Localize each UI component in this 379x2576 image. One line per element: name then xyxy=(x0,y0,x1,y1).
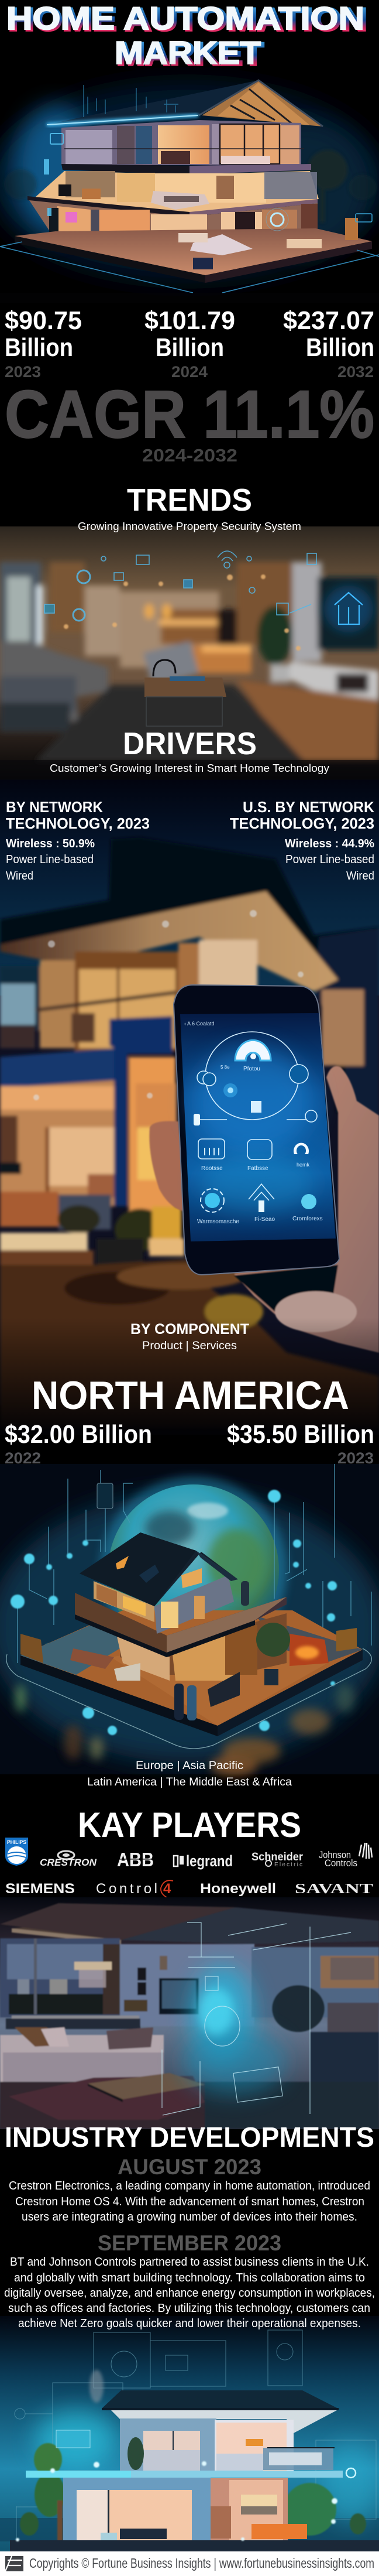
sofa xyxy=(0,2035,164,2082)
floor reflections xyxy=(16,1684,354,1776)
neon ground lines xyxy=(0,242,379,293)
middle floor xyxy=(35,171,319,213)
regional labels: Latin America | The Middle East & Africa xyxy=(87,1776,292,1788)
logo: Crestron xyxy=(40,1851,97,1868)
stat: 2024 value: $101.79 xyxy=(144,306,235,335)
footer bar xyxy=(0,2551,379,2576)
image: modern house with smart overlays xyxy=(0,2316,379,2551)
globe xyxy=(100,1476,287,1664)
palm trees xyxy=(4,150,377,223)
by component: Product | Services xyxy=(142,1340,237,1352)
bottom fade of house image xyxy=(0,1318,379,1435)
network technology share, U.S.: TECHNOLOGY, 2023 xyxy=(230,815,374,832)
top floor xyxy=(61,120,301,165)
development: August 2023: users are integrating a growing number of devices into their homes. xyxy=(22,2211,357,2223)
last paragraph line: achieve Net Zero goals quicker and lower their operational expenses. xyxy=(18,2317,361,2330)
floor xyxy=(237,679,379,761)
logo: Legrand: legrand xyxy=(186,1852,233,1870)
image: isometric house with globe xyxy=(0,1464,379,1776)
trends heading: TRENDS xyxy=(127,483,252,518)
upper deck xyxy=(75,1593,287,1653)
armchair xyxy=(143,641,199,685)
hand behind phone xyxy=(149,1066,379,1353)
plant xyxy=(257,606,292,665)
TV screen xyxy=(318,577,379,650)
by component: BY COMPONENT xyxy=(130,1321,249,1337)
hologram lines xyxy=(162,1922,351,2115)
industry developments heading xyxy=(0,2122,379,2335)
plants xyxy=(58,1205,100,1233)
back wall and kitchen xyxy=(120,591,219,668)
phone app icons xyxy=(184,1021,323,1225)
ground floor xyxy=(63,2478,211,2540)
phone app icons: Pfotou xyxy=(243,1066,260,1072)
title xyxy=(6,0,367,72)
door xyxy=(129,1057,175,1215)
ground slab xyxy=(10,2540,379,2551)
lights xyxy=(16,2461,337,2541)
sofa and furniture xyxy=(70,1648,114,1669)
dark roof mass xyxy=(0,837,379,1113)
development: September 2023: and globally with smart building technology. This collaboration aims to xyxy=(14,2271,365,2284)
sofa below xyxy=(0,1192,58,1227)
logo: Schneider Electric: Electric xyxy=(274,1862,302,1868)
network technology share, U.S. xyxy=(230,798,374,882)
ground floor warm xyxy=(0,1080,114,1206)
holographic thermostat xyxy=(271,213,284,226)
north america 2023 value: 2023 xyxy=(337,1449,374,1467)
roof xyxy=(47,80,259,125)
north america 2022 value xyxy=(5,1420,152,1467)
person on deck xyxy=(241,1581,249,1606)
development: August 2023 xyxy=(9,2155,370,2223)
phone app icons: Rootsse xyxy=(201,1165,223,1172)
right wall behind phone xyxy=(322,990,364,1066)
logo: Control4: 4 xyxy=(163,1881,171,1897)
development: September 2023 xyxy=(4,2231,375,2315)
logo: Legrand xyxy=(174,1852,233,1870)
by component xyxy=(130,1321,249,1352)
network technology share, U.S.: Wired xyxy=(346,870,374,882)
coffee table xyxy=(88,2073,205,2099)
network technology share, global: BY NETWORK xyxy=(6,798,103,816)
logo: Philips: PHILIPS xyxy=(7,1839,26,1845)
logo: Honeywell: Honeywell xyxy=(200,1881,276,1897)
stat: 2024 value: Billion xyxy=(156,333,224,362)
key players heading: KAY PLAYERS xyxy=(78,1805,301,1845)
network technology share, global: Wireless : 50.9% xyxy=(6,837,95,850)
stat: 2024 value: 2024 xyxy=(171,363,208,381)
logo: Savant: SAVANT xyxy=(295,1881,373,1897)
hologram panels left xyxy=(44,134,63,216)
window xyxy=(0,1938,120,2017)
right art xyxy=(321,1956,379,1988)
stat: 2024 value xyxy=(144,306,235,381)
regional labels: Europe | Asia Pacific xyxy=(136,1760,243,1772)
logo: Crestron: CRESTRON xyxy=(40,1857,97,1868)
logo: Philips xyxy=(5,1838,28,1866)
phone app icons: Fi-Seao xyxy=(254,1216,275,1223)
stat: 2023 value: Billion xyxy=(5,333,73,362)
circuit lines xyxy=(18,1464,371,1663)
tree xyxy=(256,1623,290,1657)
logo: Schneider Electric: Schneider xyxy=(251,1851,304,1863)
pendant light xyxy=(74,1962,112,1970)
TV cabinet xyxy=(290,662,379,700)
neon base outline xyxy=(6,1648,371,1749)
walls xyxy=(94,1581,154,1622)
phone screen labels: ‹ A 6 Coalatd xyxy=(184,1021,215,1027)
trends subtitle: Growing Innovative Property Security System xyxy=(78,521,301,532)
left window xyxy=(0,562,41,644)
sofa xyxy=(0,641,108,732)
wall xyxy=(120,1944,254,2026)
floor xyxy=(0,2082,205,2129)
image: smart living room interior xyxy=(0,1897,379,2129)
stat: 2032 value xyxy=(283,306,374,381)
hologram glow xyxy=(190,1965,254,2064)
frames xyxy=(137,1968,146,1980)
stat: 2023 value: $90.75 xyxy=(5,306,82,335)
regional labels xyxy=(87,1760,292,1788)
right dark wall xyxy=(316,928,379,1259)
phone body xyxy=(174,985,339,1275)
network technology share, global: TECHNOLOGY, 2023 xyxy=(6,815,150,832)
drivers subtitle: Customer’s Growing Interest in Smart Home Technology xyxy=(50,762,329,774)
neon roof line xyxy=(47,115,198,125)
upper walls xyxy=(120,2418,216,2471)
smoke xyxy=(89,2370,104,2403)
network technology share, global: Wired xyxy=(6,870,33,882)
title: MARKET xyxy=(115,35,261,71)
logo: Control4: Control xyxy=(96,1881,157,1897)
bokeh lights xyxy=(64,574,301,651)
development: August 2023: Crestron Home OS 4. With the advancement of smart homes, Crestron xyxy=(15,2195,364,2208)
development: September 2023: BT and Johnson Controls partnered to assist business clients in the U.K. xyxy=(10,2256,369,2269)
network technology share, global xyxy=(6,798,150,882)
logo: Johnson Controls xyxy=(319,1843,372,1869)
couple xyxy=(174,1684,197,1720)
floor platform xyxy=(20,1610,363,1726)
phone app icons: 5 8e xyxy=(220,1065,230,1070)
industry developments heading: INDUSTRY DEVELOPMENTS xyxy=(5,2122,374,2153)
title: HOME AUTOMATION xyxy=(6,0,364,36)
slab 1 xyxy=(61,164,190,175)
lower storey xyxy=(120,1613,287,1675)
logo: Johnson Controls: Johnson xyxy=(319,1849,351,1860)
network technology share, global: Power Line-based xyxy=(6,853,94,866)
phone screen xyxy=(180,1013,336,1241)
slab 2 xyxy=(27,196,190,217)
table xyxy=(12,2016,139,2019)
platform floor xyxy=(15,228,372,275)
phone app icons: Cromforexs xyxy=(292,1216,323,1222)
roof xyxy=(80,1532,238,1606)
network technology share, U.S.: U.S. BY NETWORK xyxy=(243,798,374,816)
title: HOME AUTOMATION xyxy=(8,1,367,37)
footer logo xyxy=(5,2556,23,2571)
drivers heading: DRIVERS xyxy=(123,726,257,761)
image: smart house cross-section xyxy=(0,80,379,303)
icon: smart house on TV xyxy=(324,586,373,632)
warm ceiling xyxy=(0,891,338,991)
logo: Johnson Controls: Controls xyxy=(325,1857,357,1869)
image: blurred living room with smart icons xyxy=(0,526,379,779)
north america 2023 value xyxy=(227,1420,374,1467)
ceiling lights xyxy=(33,910,304,1100)
development: August 2023: AUGUST 2023 xyxy=(118,2155,261,2179)
development: September 2023: SEPTEMBER 2023 xyxy=(98,2231,281,2255)
roof xyxy=(102,2390,338,2409)
phone app icons: Fatbsse xyxy=(247,1165,268,1172)
network technology share, U.S.: Wireless : 44.9% xyxy=(285,837,374,850)
CAGR callout: 2024-2032 xyxy=(142,445,237,466)
image: house exterior with phone xyxy=(0,779,379,1435)
upper wall and windows xyxy=(0,966,40,1031)
north america heading: NORTH AMERICA xyxy=(32,1373,349,1418)
coffee table xyxy=(144,678,226,697)
trees xyxy=(20,2443,366,2544)
ceiling xyxy=(12,1907,236,1940)
blue slab and pillar xyxy=(0,1048,114,1088)
ground floor xyxy=(29,200,318,240)
stat: 2023 value xyxy=(5,306,82,381)
lamps xyxy=(144,604,154,619)
warm ground strip xyxy=(0,1233,88,1250)
hologram city on roof xyxy=(84,85,178,117)
balcony furniture xyxy=(71,1013,95,1042)
north america 2022 value: $32.00 Billion xyxy=(5,1420,152,1449)
glowing nodes xyxy=(11,1490,346,1735)
panel: dark band behind drivers subtitle xyxy=(0,760,379,780)
phone app icons: hemk xyxy=(297,1162,310,1168)
TV panel xyxy=(159,1978,199,2014)
icons: smart devices network xyxy=(44,551,316,621)
phone app icons: Warmsomasche xyxy=(197,1219,239,1225)
overlay outlines xyxy=(15,2330,376,2539)
development: August 2023: Crestron Electronics, a leading company in home automation, introduced xyxy=(9,2180,370,2192)
stat: 2032 value: $237.07 xyxy=(283,306,374,335)
slab xyxy=(26,2471,343,2478)
side cabinets xyxy=(20,1634,43,1663)
network technology share, U.S.: Power Line-based xyxy=(285,853,374,866)
fireplace xyxy=(290,1634,329,1666)
logo: Siemens: SIEMENS xyxy=(5,1881,75,1897)
stat: 2023 value: 2023 xyxy=(5,363,41,381)
stat: 2032 value: 2032 xyxy=(337,363,374,381)
beds and furniture xyxy=(190,234,253,255)
trends subtitle xyxy=(0,520,379,532)
soffit xyxy=(111,2410,337,2433)
title: MARKET xyxy=(116,36,264,72)
development: September 2023: such as offices and factories. By utilizing this technology, customers can xyxy=(8,2302,370,2315)
logo: ABB: ABB xyxy=(117,1849,154,1870)
north america 2022 value: 2022 xyxy=(5,1449,41,1467)
